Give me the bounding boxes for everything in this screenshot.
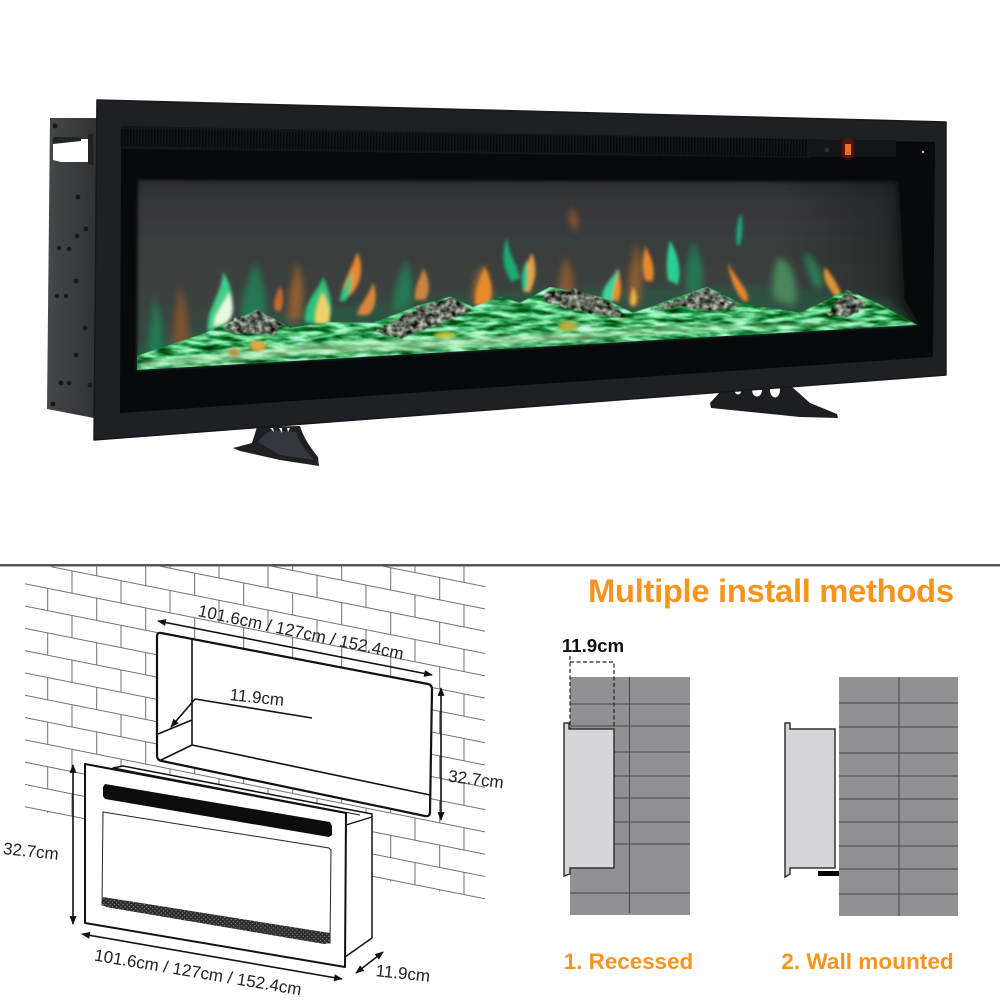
recess depth arrow [171, 699, 195, 727]
left foot stand [233, 426, 319, 466]
glass firebox [137, 180, 917, 370]
label: recessed: 1. Recessed [564, 949, 693, 974]
fireplace outer frame [94, 100, 946, 440]
fireplace side housing [47, 118, 97, 418]
divider band [0, 564, 1000, 566]
recess depth label: 11.9cm [229, 685, 285, 710]
fireplace line drawing [85, 764, 372, 967]
front width arrow [82, 934, 342, 979]
recess width arrow [158, 621, 432, 675]
brick wall section [839, 677, 958, 916]
wall mounted fireplace body [785, 723, 835, 877]
heading: multiple install methods: Multiple install methods [588, 572, 954, 609]
flames [137, 207, 917, 370]
depth label: 11.9cm [562, 635, 624, 656]
top vent strip [121, 126, 810, 158]
recessed fireplace body [564, 723, 614, 876]
panel: wall mounted install [781, 677, 958, 974]
brick wall [25, 566, 485, 902]
front height arrow [72, 765, 74, 924]
recess width label: 101.6cm / 127cm / 152.4cm [196, 601, 405, 664]
brick wall section [570, 677, 690, 915]
front depth label: 11.9cm [375, 961, 431, 986]
logs and ember bed [137, 287, 917, 370]
right foot stand [710, 382, 838, 418]
front width label: 101.6cm / 127cm / 152.4cm [93, 946, 303, 999]
recess height arrow [440, 688, 442, 820]
wall recess outline [157, 633, 432, 816]
panel: recessed install [562, 635, 693, 974]
front height label: 32.7cm [2, 839, 60, 864]
label: wall mounted: 2. Wall mounted [781, 949, 954, 974]
dashed depth guide [570, 656, 614, 729]
product photo: electric fireplace [47, 100, 946, 466]
recess height label: 32.7cm [447, 767, 505, 792]
panel: dimension diagram [2, 566, 505, 999]
fireplace inner black bezel [120, 126, 935, 413]
wall bracket [818, 871, 839, 876]
control panel with red display [808, 139, 924, 159]
front depth arrow [356, 952, 383, 973]
